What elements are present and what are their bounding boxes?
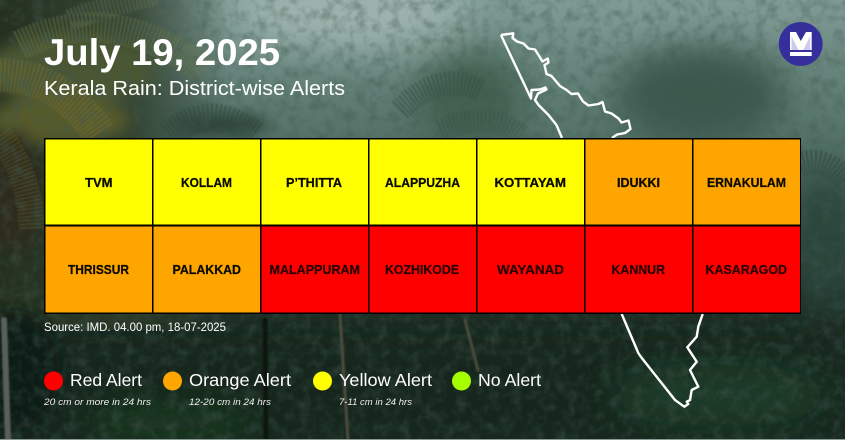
row 2: cell colours (46, 226, 800, 312)
row 1: district names: ERNAKULAM (707, 175, 786, 190)
row 2: district names: THRISSUR (68, 262, 130, 277)
row 2: district names (68, 262, 787, 277)
legend: red alert: Red Alert (70, 370, 142, 390)
row 1: district names: IDUKKI (617, 175, 660, 190)
alert table (44, 138, 801, 314)
legend: orange alert: Orange Alert (189, 370, 291, 390)
map: Kerala outline, south part (622, 314, 703, 407)
legend: orange alert (163, 370, 291, 408)
legend: yellow alert: 7-11 cm in 24 hrs (339, 397, 412, 408)
legend: red alert: 20 cm or more in 24 hrs (43, 397, 151, 408)
row 2: district names: KANNUR (612, 262, 666, 277)
logo (779, 22, 823, 66)
legend: no alert (452, 370, 541, 390)
left palm shadow (0, 0, 230, 330)
row 1: district names: KOTTAYAM (494, 175, 566, 190)
row 1: district names (85, 175, 786, 190)
legend: yellow alert (313, 370, 432, 408)
subtitle: Kerala Rain: District-wise Alerts (44, 78, 345, 100)
legend: orange alert: 12-20 cm in 24 hrs (189, 397, 271, 408)
row 1: district names: ALAPPUZHA (385, 175, 461, 190)
legend: no alert: No Alert (478, 370, 541, 390)
title: July 19, 2025 (44, 32, 280, 73)
legend (43, 370, 541, 408)
row 2: district names: WAYANAD (497, 262, 564, 277)
row 1: district names: P’THITTA (286, 175, 343, 190)
legend: red alert (43, 370, 151, 408)
row 1: cell colours (44, 138, 801, 314)
row 1: district names: TVM (85, 175, 112, 190)
row 2: district names: KASARAGOD (706, 262, 787, 277)
legend: yellow alert: Yellow Alert (339, 370, 432, 390)
row 2: district names: MALAPPURAM (270, 262, 360, 277)
map: Kerala outline, north part (501, 33, 630, 138)
source note: Source: IMD. 04.00 pm, 18-07-2025 (44, 322, 226, 334)
row 2: district names: KOZHIKODE (385, 262, 459, 277)
row 2: district names: PALAKKAD (172, 262, 241, 277)
row 1: district names: KOLLAM (181, 175, 232, 190)
palm fronds (0, 0, 845, 230)
